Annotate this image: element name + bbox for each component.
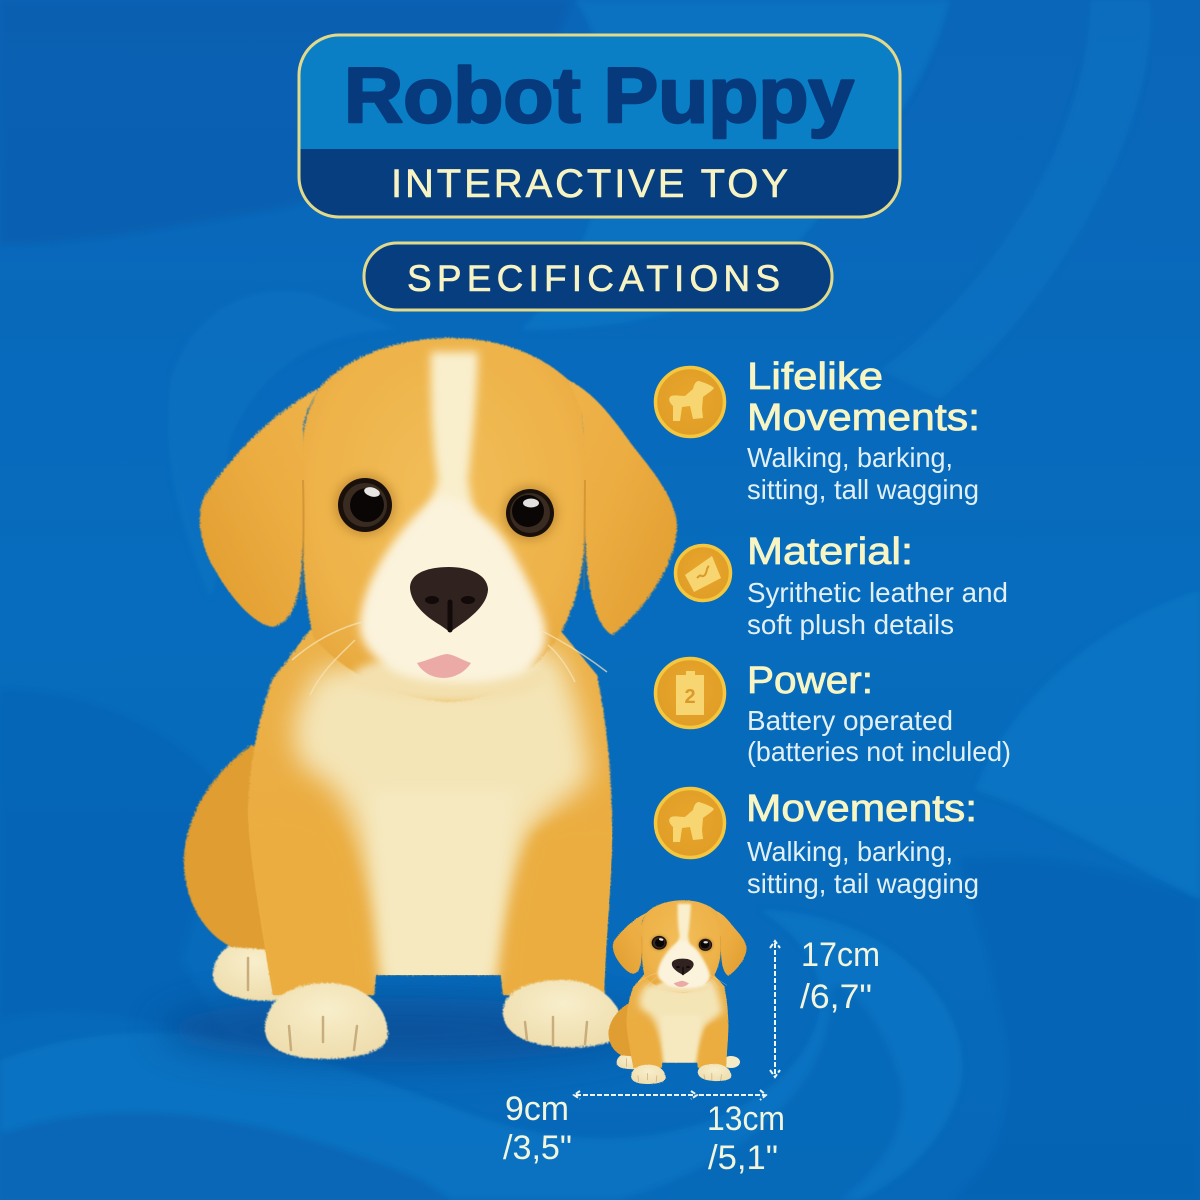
description: Battery operated: [747, 705, 953, 736]
puppy paws: [265, 980, 623, 1059]
arrow: width: [699, 1090, 766, 1100]
puppy chin: [352, 653, 548, 703]
spec: movements: sitting, tail wagging: [747, 868, 979, 899]
label: height: 17cm: [801, 936, 880, 974]
dimension: depth: /3,5": [503, 1129, 572, 1167]
subtitle band: [299, 149, 900, 217]
arrow: depth: [574, 1091, 697, 1099]
puppy head: [302, 338, 586, 702]
label: depth: 9cm: [505, 1090, 569, 1128]
icon: battery coin: [656, 658, 724, 728]
puppy muzzle: [360, 497, 546, 683]
dimension: height: /6,7": [800, 978, 872, 1016]
spec: lifelike movements: Movements:: [747, 397, 980, 439]
title band: [299, 35, 900, 149]
heading: Movements:: [746, 788, 977, 830]
icon: puppy coin: [656, 788, 724, 858]
spec: power: [656, 658, 1011, 767]
puppy whiskers: [292, 622, 607, 695]
arrow: height: [770, 941, 780, 1077]
specifications pill: SPECIFICATIONS: [407, 258, 780, 299]
spec: material: [676, 531, 1008, 640]
spec: lifelike movements: sitting, tall wagging: [747, 474, 979, 505]
large puppy illustration: [184, 338, 677, 1059]
puppy hind leg: [184, 745, 280, 950]
puppy right ear: [568, 380, 677, 635]
puppy toes: [248, 958, 587, 1050]
heading: Lifelike: [747, 356, 883, 398]
heading: Power:: [747, 660, 873, 702]
puppy left eye: [334, 474, 396, 536]
subtitle: INTERACTIVE TOY: [391, 162, 788, 206]
puppy chest and legs shading: [230, 650, 630, 1010]
heading: Material:: [747, 531, 913, 573]
icon: puppy coin: [656, 368, 724, 436]
puppy belly: [372, 790, 515, 990]
puppy body: [248, 630, 612, 995]
dimension: height: [770, 936, 880, 1077]
spec: material: soft plush details: [747, 609, 954, 640]
icon: leather swatch coin: [676, 546, 730, 600]
description: Walking, barking,: [747, 442, 953, 473]
dimension: width: /5,1": [708, 1139, 778, 1177]
ear creases: [301, 480, 585, 600]
puppy left ear: [200, 385, 325, 627]
puppy nose: [410, 567, 488, 632]
puppy right eye: [502, 485, 558, 541]
specifications pill: [364, 243, 832, 310]
puppy front legs: [230, 809, 630, 1010]
description: Walking, barking,: [747, 836, 953, 867]
description: Syrithetic leather and: [747, 577, 1008, 608]
title panel: [299, 35, 900, 217]
small puppy hind paw: [722, 1056, 740, 1068]
title: Robot Puppy: [344, 51, 854, 139]
dimension: depth: [503, 1090, 697, 1167]
puppy chest: [294, 650, 590, 985]
icon: battery coin: 2: [684, 686, 696, 708]
label: width: 13cm: [707, 1100, 785, 1138]
puppy hind paw: [213, 940, 295, 1001]
puppy tongue: [417, 654, 471, 678]
dimension: width: [699, 1090, 785, 1177]
spec: power: (batteries not incluled): [747, 736, 1011, 767]
small puppy scale model: [608, 900, 747, 1084]
puppy blaze: [426, 352, 478, 515]
panel border: [299, 35, 900, 217]
spec: lifelike movements: [656, 356, 980, 505]
floor shadow: [160, 998, 640, 1062]
spec: movements: [656, 788, 979, 899]
